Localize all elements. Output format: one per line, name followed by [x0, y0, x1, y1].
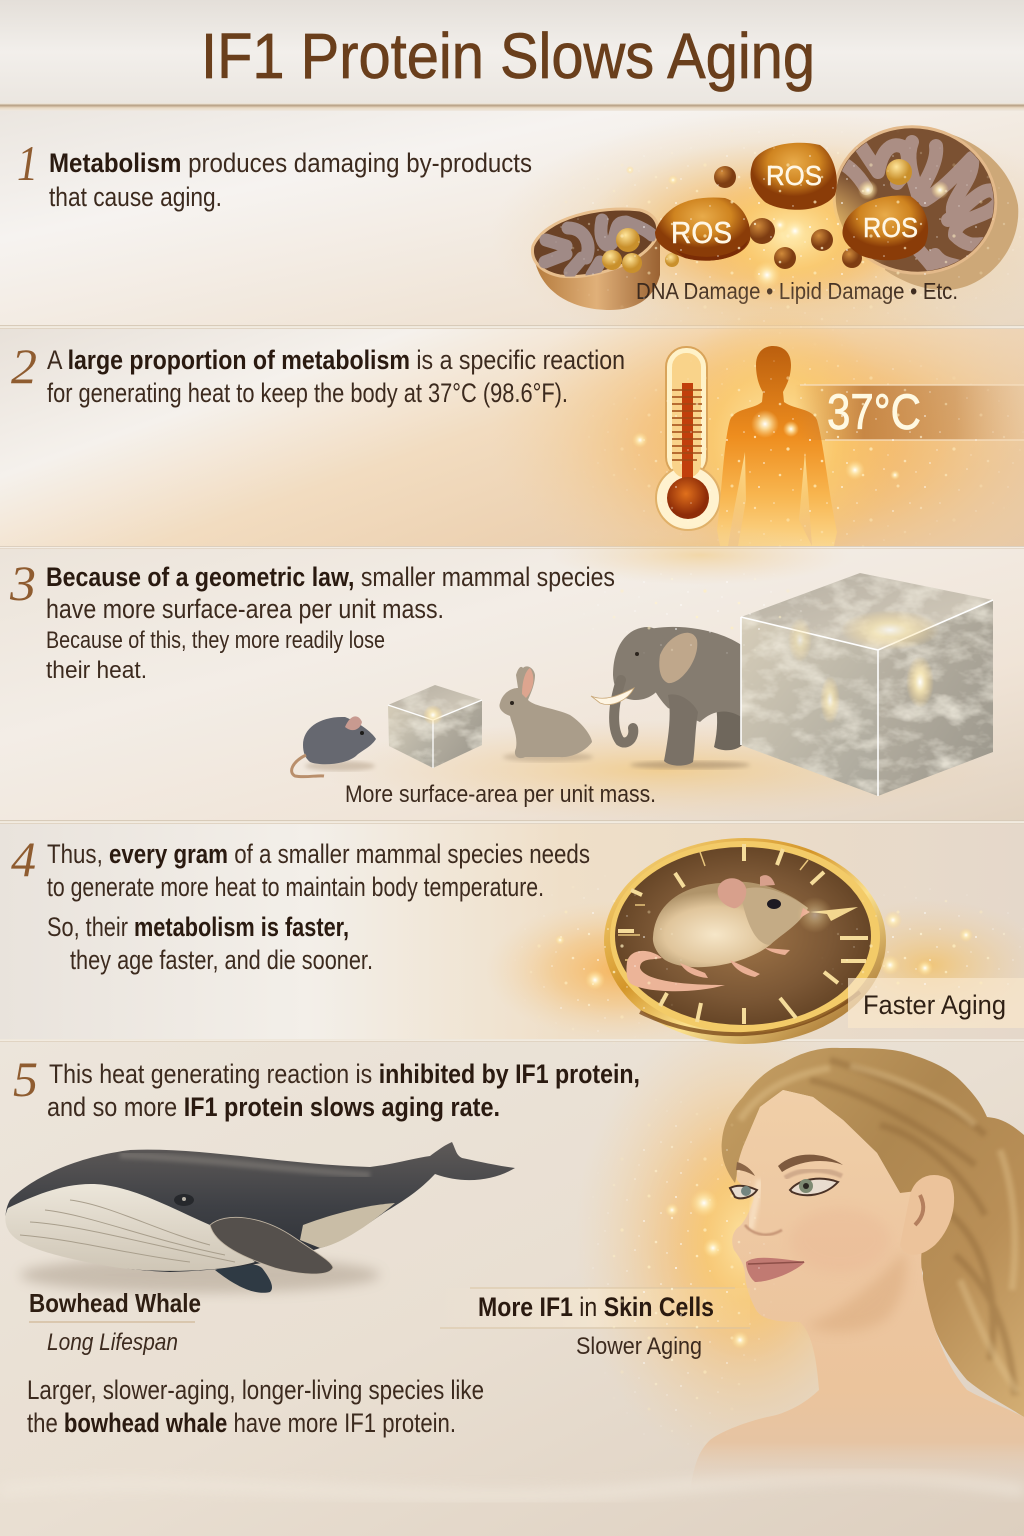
step number 4: 4: [11, 831, 36, 887]
ROS blob right: [842, 196, 928, 260]
text: geometric law: Because of this, they more readily lose: [46, 627, 385, 654]
sparkle glow: [626, 165, 949, 305]
sparkles overlay: [522, 134, 1024, 1426]
icon: mouse: [292, 716, 376, 777]
text: geometric law: their heat.: [46, 657, 147, 684]
temperature callout: 37°C: [827, 384, 921, 440]
panel 2: heat: [0, 275, 1024, 605]
step number 1: 1: [17, 135, 38, 191]
text: inhibition: [47, 1059, 640, 1122]
text: inhibition: and so more IF1 protein slows aging rate.: [47, 1092, 500, 1122]
text: heat reaction: [47, 345, 625, 408]
temperature callout: [795, 384, 1024, 440]
caption: damage: DNA Damage • Lipid Damage • Etc.: [636, 278, 958, 304]
icon: left mitochondrion: [532, 209, 660, 310]
icon: clock with mouse: [604, 838, 886, 1044]
icon: small cube: [388, 685, 482, 768]
label: bowhead whale: Bowhead Whale: [29, 1288, 201, 1318]
rat: [626, 875, 810, 991]
callout: more IF1: [440, 1288, 750, 1360]
title band: [0, 0, 1024, 104]
step number 3: 3: [9, 555, 36, 611]
icon: big cube: [741, 573, 993, 796]
text: species: the bowhead whale have more IF1 protein.: [27, 1408, 456, 1438]
panel 5: IF1 protein: [0, 1010, 1024, 1536]
text: heat need: to generate more heat to maintain body temperature.: [47, 872, 544, 902]
step number 2: 2: [11, 338, 37, 394]
label: bowhead whale: Long Lifespan: [47, 1329, 178, 1356]
label: faster aging: [848, 978, 1024, 1028]
icon: rabbit: [499, 666, 593, 762]
panel 4: faster metabolism: [0, 824, 1024, 1044]
icon: thermometer: [656, 347, 720, 530]
ROS blob top: [751, 143, 837, 210]
text: heat need: Thus, every gram of a smaller mammal species needs: [47, 839, 590, 869]
text: inhibition: This heat generating reaction is inhibited by IF1 protein,: [49, 1059, 640, 1089]
ROS blob right: ROS: [863, 212, 918, 243]
text: heat need: [47, 839, 590, 975]
label: bowhead whale: [29, 1288, 201, 1356]
icon: glowing body: [717, 346, 837, 546]
text: geometric law: Because of a geometric law, smaller mammal species: [46, 562, 615, 592]
caption: surface area: More surface-area per unit mass.: [345, 781, 656, 808]
ROS blob top: ROS: [766, 160, 822, 191]
panel 1: metabolism: [0, 111, 1024, 325]
text: species: Larger, slower-aging, longer-living species like: [27, 1375, 484, 1405]
callout: more IF1: More IF1 in Skin Cells: [478, 1292, 714, 1322]
text: metabolism: [49, 148, 532, 212]
text: heat need: So, their metabolism is faster,: [47, 912, 349, 942]
label: faster aging: Faster Aging: [863, 990, 1006, 1020]
text: heat reaction: for generating heat to keep the body at 37°C (98.6°F).: [47, 378, 568, 408]
text: species: [27, 1375, 484, 1438]
title: IF1 Protein Slows Aging: [201, 20, 815, 92]
ROS blob left: [655, 197, 750, 261]
illustration: bowhead whale: [5, 1142, 515, 1293]
text: heat need: they age faster, and die sooner.: [70, 945, 373, 975]
illustration: woman profile: [690, 1048, 1024, 1490]
text: metabolism: Metabolism produces damaging by-products: [49, 148, 532, 178]
panel 3: geometric law: [0, 525, 1024, 821]
text: metabolism: that cause aging.: [49, 182, 222, 212]
ROS blob left: ROS: [671, 215, 732, 250]
droplets: [665, 166, 862, 269]
text: heat reaction: A large proportion of metabolism is a specific reaction: [47, 345, 625, 375]
step number 5: 5: [13, 1051, 38, 1107]
text: geometric law: [46, 562, 615, 684]
callout: more IF1: Slower Aging: [576, 1333, 702, 1360]
icon: elephant: [591, 627, 750, 769]
icon: right mitochondrion: [833, 125, 1018, 290]
text: geometric law: have more surface-area per unit mass.: [46, 594, 444, 624]
